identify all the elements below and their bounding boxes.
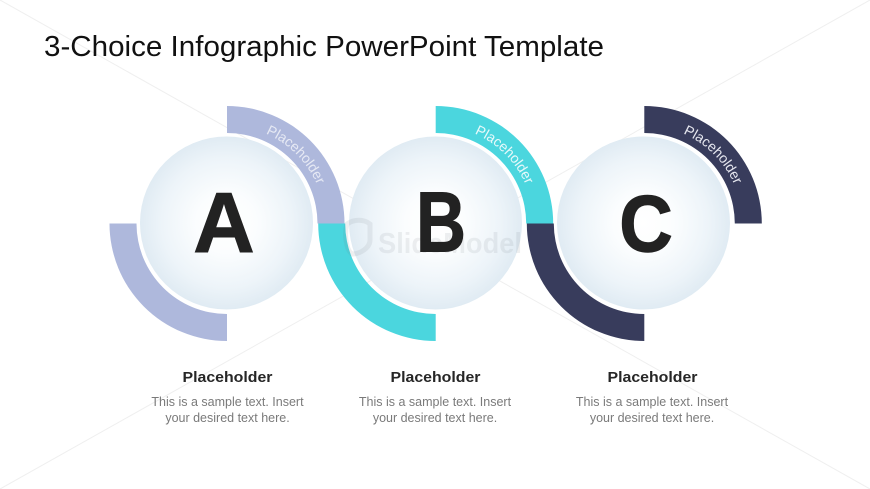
- caption B heading: Placeholder: [390, 369, 481, 386]
- caption A: [151, 369, 304, 425]
- watermark icon: [346, 220, 370, 254]
- caption C body: This is a sample text. Insert: [576, 395, 729, 409]
- letter C: C: [620, 179, 672, 268]
- option C: ring and circle: [526, 106, 762, 341]
- circle C: [557, 136, 730, 310]
- letter B: B: [416, 176, 466, 270]
- option A: ring and circle: [110, 106, 344, 341]
- watermark: [346, 220, 522, 260]
- arc C top-right: [644, 106, 762, 224]
- caption A heading: Placeholder: [182, 369, 273, 386]
- arc label C: Placeholder: [684, 125, 741, 182]
- arc A top-right: [227, 106, 344, 224]
- arc B bottom-left: [318, 224, 436, 341]
- title: 3-Choice Infographic PowerPoint Template: [44, 31, 604, 63]
- option B: ring and circle: [318, 106, 554, 341]
- arc A bottom-left: [110, 224, 227, 341]
- arc label B: Placeholder: [476, 125, 532, 182]
- circle A: [140, 136, 313, 310]
- letter A: A: [193, 176, 255, 271]
- watermark text: SlideModel: [378, 228, 522, 260]
- caption C: [576, 369, 729, 425]
- circle B: [349, 136, 522, 310]
- caption A body: your desired text here.: [165, 411, 290, 425]
- caption B body: This is a sample text. Insert: [359, 395, 512, 409]
- arc B top-right: [436, 106, 553, 224]
- caption B: [359, 369, 512, 425]
- caption C body: your desired text here.: [590, 411, 714, 425]
- arc label A: Placeholder: [266, 125, 324, 182]
- caption C heading: Placeholder: [608, 369, 698, 386]
- arc C bottom-left: [527, 224, 644, 341]
- caption B body: your desired text here.: [373, 411, 497, 425]
- caption A body: This is a sample text. Insert: [151, 395, 304, 409]
